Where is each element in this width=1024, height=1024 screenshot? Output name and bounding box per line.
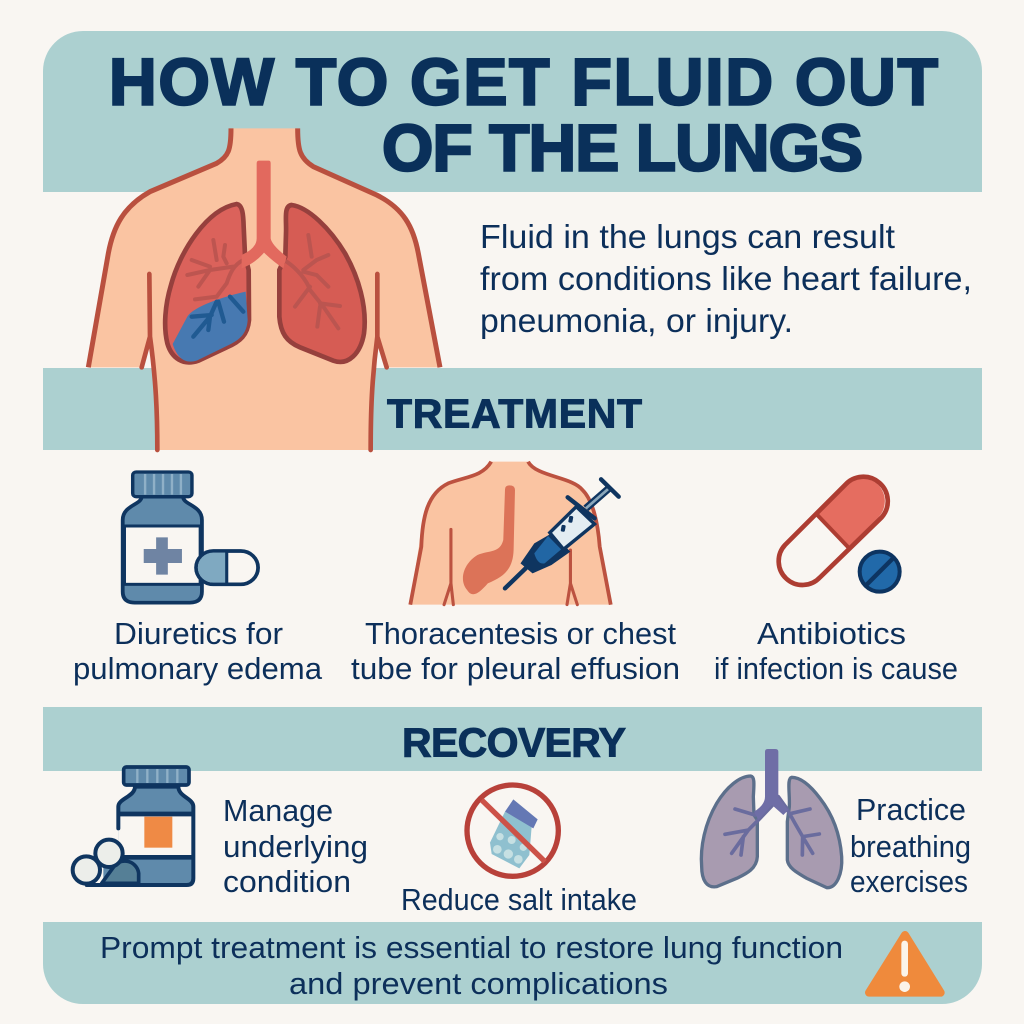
left lung <box>165 204 249 362</box>
treatment captions <box>73 616 958 686</box>
icon: medicine bottle with capsule <box>123 472 258 603</box>
icon: warning triangle <box>869 935 941 993</box>
icon: no salt sign <box>467 785 558 876</box>
right bronchial branches <box>287 235 340 328</box>
recovery caption: manage: Manage <box>223 793 333 828</box>
icon: antibiotic capsule and tablet <box>779 477 900 592</box>
trachea and bronchi <box>242 161 287 268</box>
icon: purple lungs <box>701 749 842 888</box>
treatment captions: Thoracentesis or chest <box>365 616 676 651</box>
capsule <box>196 551 258 584</box>
intro text: pneumonia, or injury. <box>480 303 793 340</box>
recovery caption: manage <box>223 793 368 899</box>
intro text: from conditions like heart failure, <box>480 261 972 298</box>
icon: pill bottle with tablets <box>73 767 193 885</box>
recovery caption: manage: underlying <box>223 829 368 864</box>
treatment captions: tube for pleural effusion <box>351 651 680 686</box>
fluid shape <box>463 485 515 594</box>
footer message: Prompt treatment is essential to restore lung function <box>100 930 843 965</box>
icon: chest with syringe <box>410 462 619 605</box>
title <box>109 44 938 184</box>
fluid branches <box>192 297 243 337</box>
torso outline <box>88 128 440 367</box>
recovery caption: salt: Reduce salt intake <box>401 882 637 917</box>
arm lines <box>142 274 387 450</box>
tablets <box>102 861 139 883</box>
cross <box>144 537 182 575</box>
title: HOW TO GET FLUID OUT <box>109 44 938 118</box>
cap <box>133 472 192 497</box>
torso <box>410 462 612 605</box>
intro text: Fluid in the lungs can result <box>480 219 896 256</box>
treatment captions: pulmonary edema <box>73 651 323 686</box>
intro text <box>480 219 972 340</box>
recovery caption: breathing: Practice <box>856 792 966 827</box>
recovery caption: breathing: breathing <box>850 829 971 864</box>
recovery caption: breathing: exercises <box>850 864 968 899</box>
footer message: and prevent complications <box>289 966 668 1001</box>
left bronchial branches <box>187 240 243 299</box>
treatment captions: Antibiotics <box>757 616 906 651</box>
heading: treatment: TREATMENT <box>387 390 642 436</box>
heading: recovery: RECOVERY <box>402 720 626 766</box>
upper torso <box>87 128 440 450</box>
right lung <box>279 205 365 362</box>
title: OF THE LUNGS <box>382 110 863 184</box>
footer message <box>100 930 843 1001</box>
cap <box>124 767 189 785</box>
treatment captions: Diuretics for <box>114 616 283 651</box>
label <box>124 526 200 584</box>
syringe <box>505 479 619 588</box>
treatment captions: if infection is cause <box>714 651 958 686</box>
fluid in left lung <box>173 292 248 362</box>
tablet <box>860 552 900 592</box>
illustration: torso with lungs <box>87 128 440 450</box>
recovery caption: breathing <box>850 792 971 899</box>
recovery caption: manage: condition <box>223 864 351 899</box>
trachea and branches <box>725 797 819 855</box>
bottle body <box>123 497 202 603</box>
